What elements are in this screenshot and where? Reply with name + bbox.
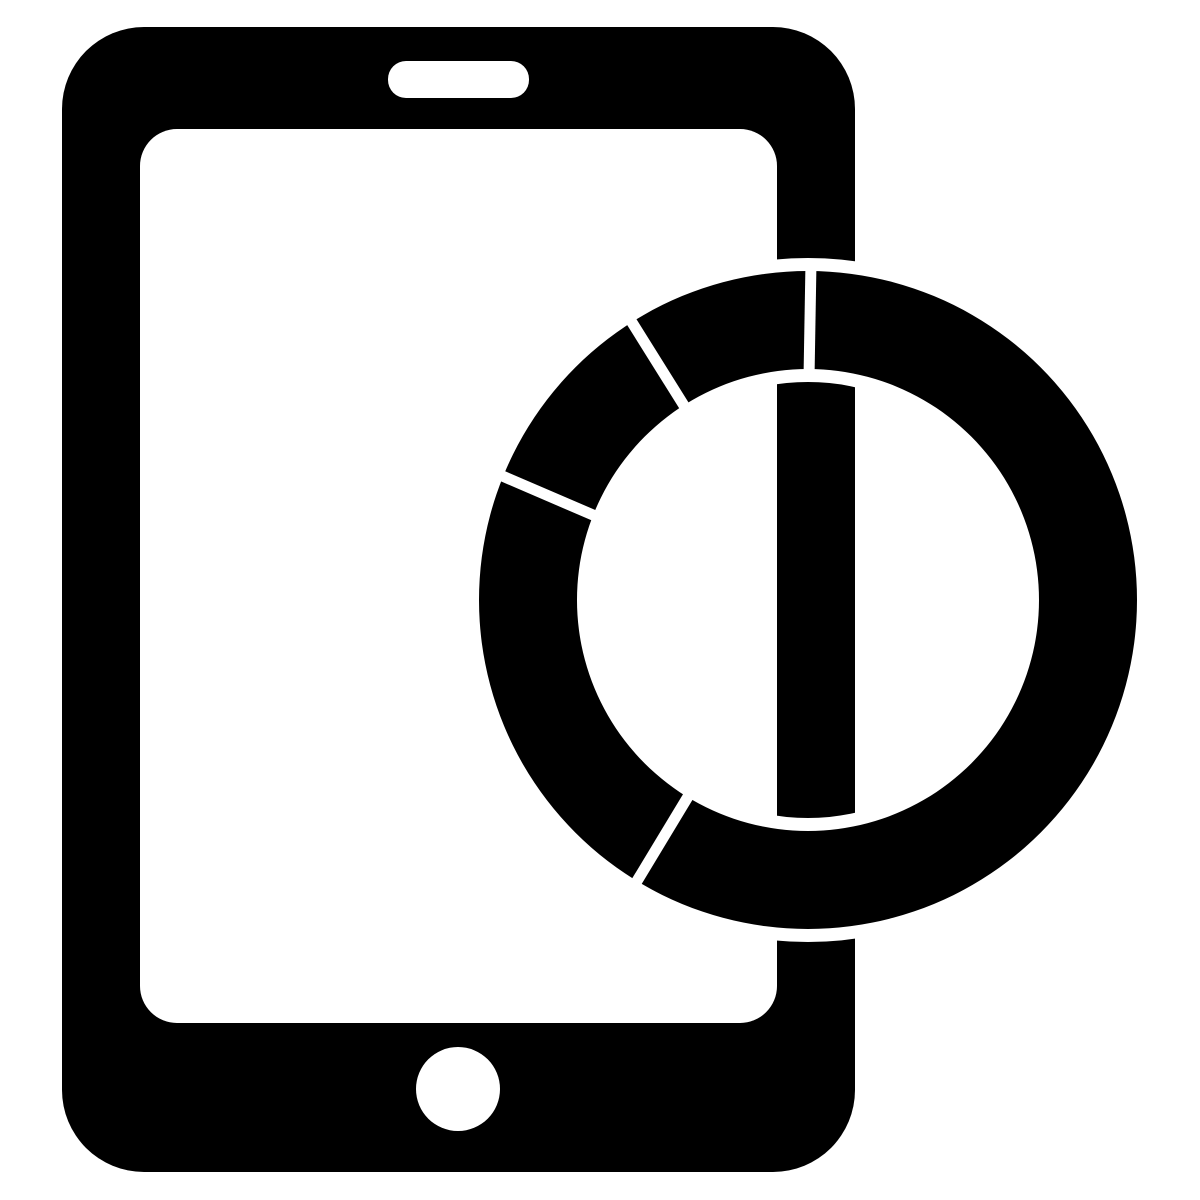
device body: [62, 27, 855, 1172]
donut chart: [479, 262, 1137, 929]
white cutout behind chart: [466, 258, 1150, 942]
inner bar: [777, 370, 855, 830]
